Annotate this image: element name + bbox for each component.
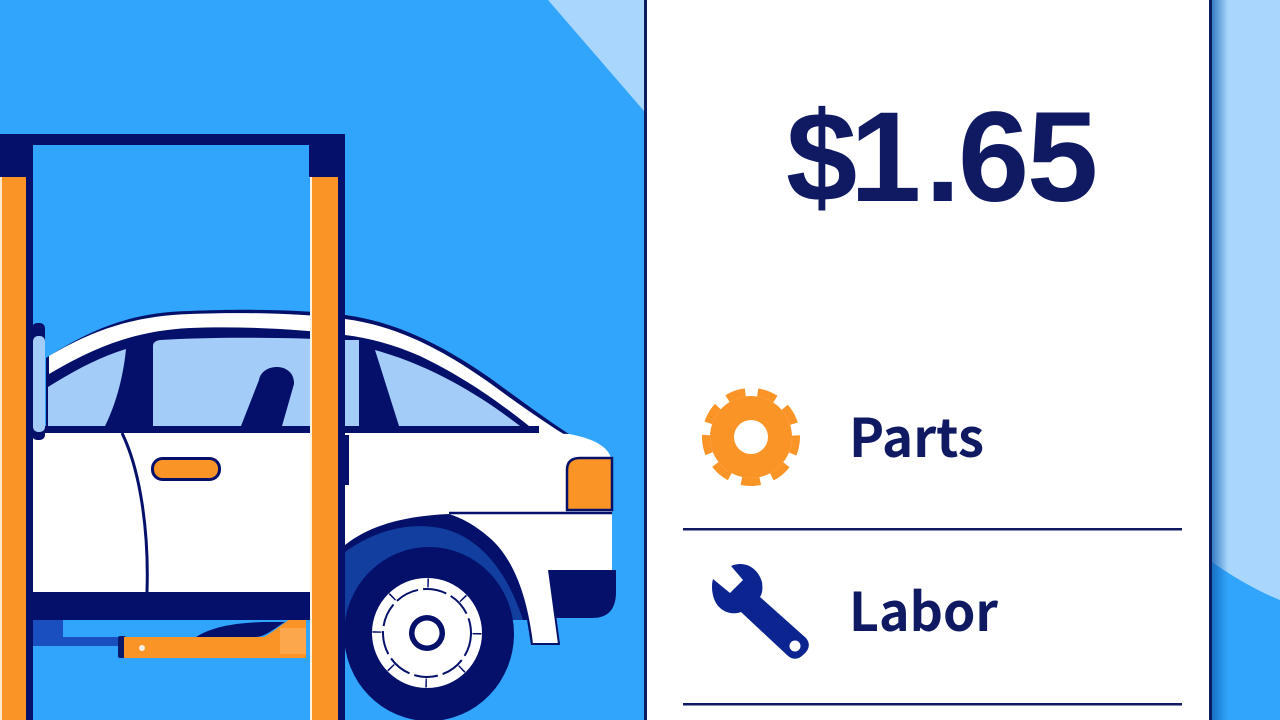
door handle — [152, 458, 220, 480]
front window — [375, 350, 520, 426]
side sill — [33, 592, 313, 620]
panel: price card — [646, 0, 1210, 720]
divider — [683, 703, 1182, 706]
wheel arch — [345, 514, 535, 645]
headlight — [567, 458, 612, 510]
bumper — [549, 570, 616, 618]
car — [32, 310, 616, 720]
car body — [33, 433, 612, 592]
right edge shadow — [1212, 0, 1228, 720]
lift arm — [33, 610, 306, 658]
price: $1.65 — [786, 86, 1098, 229]
icon: gear — [704, 390, 798, 484]
left column — [0, 134, 33, 720]
wheel well — [345, 526, 523, 620]
seat — [241, 367, 294, 426]
front fender — [449, 514, 612, 644]
lift frame — [0, 134, 345, 720]
fender skirt outline — [533, 570, 559, 644]
label: labor: Labor — [849, 571, 999, 647]
lift crossbar — [0, 134, 345, 145]
label: parts: Parts — [849, 397, 984, 473]
middle window — [153, 338, 359, 426]
divider — [683, 528, 1182, 530]
rear window — [48, 349, 126, 426]
background light triangle — [548, 0, 644, 111]
door edge behind pillar — [345, 435, 349, 485]
window sill line — [33, 426, 539, 434]
rear light strip — [32, 323, 45, 440]
door seam — [122, 433, 147, 592]
tyre — [344, 547, 514, 720]
icon: wrench — [712, 564, 809, 659]
right column — [309, 134, 345, 720]
car roof and cabin — [46, 310, 569, 434]
wheel hub — [372, 578, 482, 688]
background right light band — [1212, 0, 1280, 600]
body crease — [449, 512, 612, 514]
roof white band — [49, 313, 567, 436]
